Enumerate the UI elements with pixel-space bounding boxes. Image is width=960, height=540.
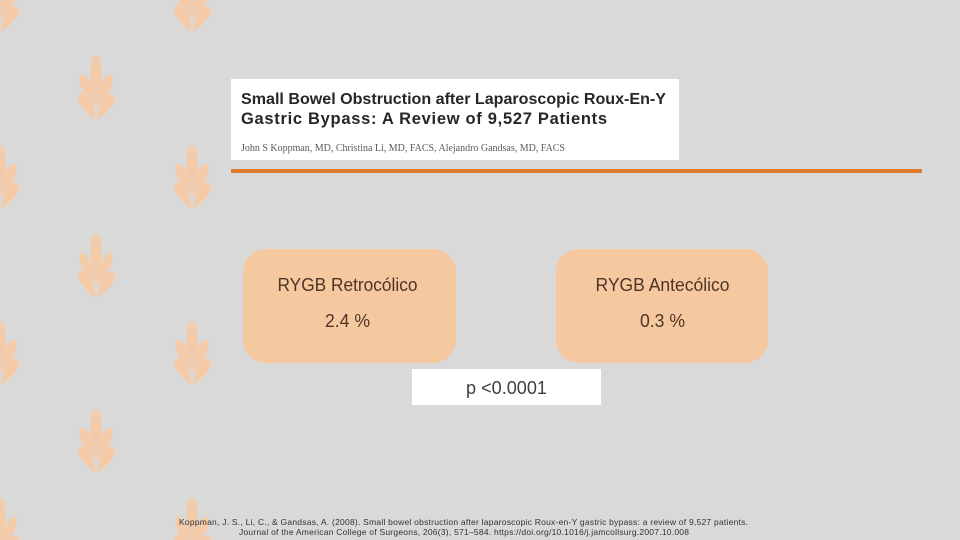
panel: RYGB antecolic (556, 249, 768, 363)
panel label: RYGB Retrocólico (278, 275, 418, 295)
panel: RYGB retrocolic (243, 249, 456, 363)
panel label: RYGB Antecólico (596, 275, 730, 295)
panel value: 0.3 % (640, 311, 685, 331)
citation (179, 517, 748, 537)
citation: Journal of the American College of Surgeons, 206(3), 571–584. https://doi.org/10.1016/j.jamcollsurg.2007.10.008 (239, 527, 689, 537)
panel value: 2.4 % (325, 311, 370, 331)
orange divider (231, 169, 922, 173)
background leaf pattern (0, 0, 214, 540)
article title: Small Bowel Obstruction after Laparoscopic Roux-En-Y (241, 91, 667, 108)
p-value callout (412, 369, 601, 405)
article authors: John S Koppman, MD, Christina Li, MD, FACS, Alejandro Gandsas, MD, FACS (241, 143, 565, 154)
citation: Koppman, J. S., Li, C., & Gandsas, A. (2008). Small bowel obstruction after laparoscopic Roux-en-Y gastric bypass: a review of 9,527 patients. (179, 517, 748, 527)
article title: Gastric Bypass: A Review of 9,527 Patients (241, 110, 607, 128)
article header panel (231, 79, 679, 160)
article title (241, 91, 667, 128)
p-value callout: p <0.0001 (466, 378, 547, 398)
